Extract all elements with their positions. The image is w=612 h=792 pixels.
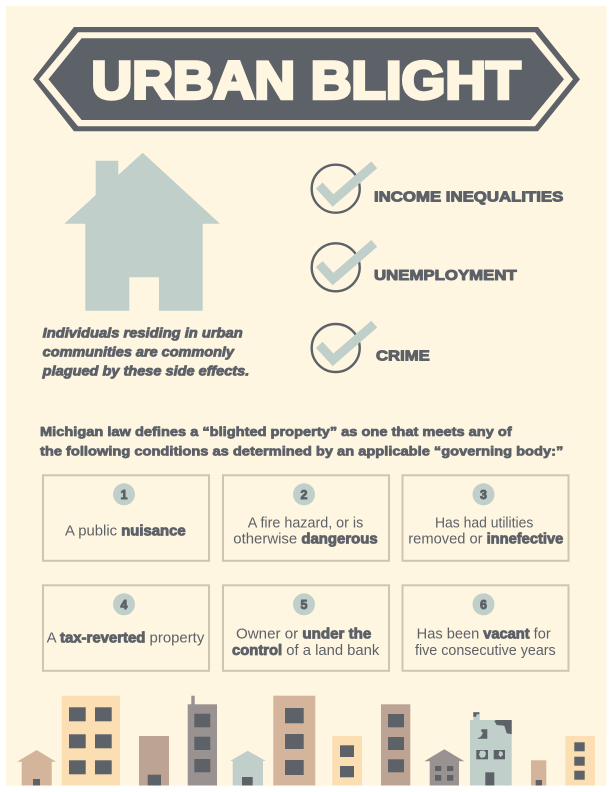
card 4: 4 (121, 598, 128, 612)
card 6: five consecutive years (415, 643, 556, 659)
card 6: 6 (480, 598, 487, 612)
card 1: A public nuisance (65, 524, 186, 540)
card 1: 1 (121, 488, 128, 502)
building: right cream block (565, 736, 595, 786)
definition paragraph: the following conditions as determined by an applicable “governing body:” (40, 443, 563, 458)
card 2: otherwise dangerous (233, 532, 378, 548)
card 5: Owner or under the (236, 627, 371, 643)
building: tall cream block (62, 696, 120, 786)
card 3: Has had utilities (435, 516, 533, 532)
icon: house (64, 153, 220, 311)
building: tan house (17, 750, 56, 786)
card 3: removed or innefective (408, 532, 563, 548)
check item: crime: CRIME (376, 348, 430, 365)
check item: income inequalities (312, 165, 563, 213)
building: grey house (424, 749, 464, 786)
building: tall tan block (273, 696, 315, 786)
card 3: 3 (480, 488, 487, 502)
check item: crime (312, 324, 430, 372)
building: grey tower with antenna (188, 696, 217, 786)
side effects caption: plagued by these side effects. (42, 363, 249, 378)
skyline (17, 696, 595, 786)
side effects caption: Individuals residing in urban (43, 325, 243, 340)
card 2 (223, 475, 389, 561)
card 5 (223, 585, 389, 671)
definition paragraph: Michigan law defines a “blighted property” as one that meets any of (40, 424, 512, 439)
card 2: 2 (301, 488, 308, 502)
card 5: control of a land bank (232, 643, 380, 659)
building: low mauve block (139, 736, 169, 786)
card 6: Has been vacant for (417, 627, 551, 643)
check item: unemployment: UNEMPLOYMENT (374, 267, 517, 284)
side effects caption (42, 325, 249, 378)
card 3 (402, 475, 568, 561)
card 6 (402, 585, 568, 671)
title: URBAN BLIGHT (92, 52, 520, 111)
title banner (33, 27, 580, 131)
building: mauve tower (381, 704, 410, 786)
check item: income inequalities: INCOME INEQUALITIES (374, 189, 563, 206)
side effects caption: communities are commonly (43, 344, 236, 359)
card 4: A tax-reverted property (47, 631, 205, 647)
building: low cream block (332, 736, 362, 786)
card 5: 5 (301, 598, 308, 612)
definition paragraph (40, 424, 563, 458)
card 4 (43, 585, 209, 671)
check item: unemployment (312, 243, 517, 291)
card 1 (43, 475, 209, 561)
building: mint house (230, 751, 266, 786)
building: blighted mint block (470, 712, 512, 786)
card 2: A fire hazard, or is (248, 516, 363, 532)
building: small tan block (531, 760, 546, 786)
